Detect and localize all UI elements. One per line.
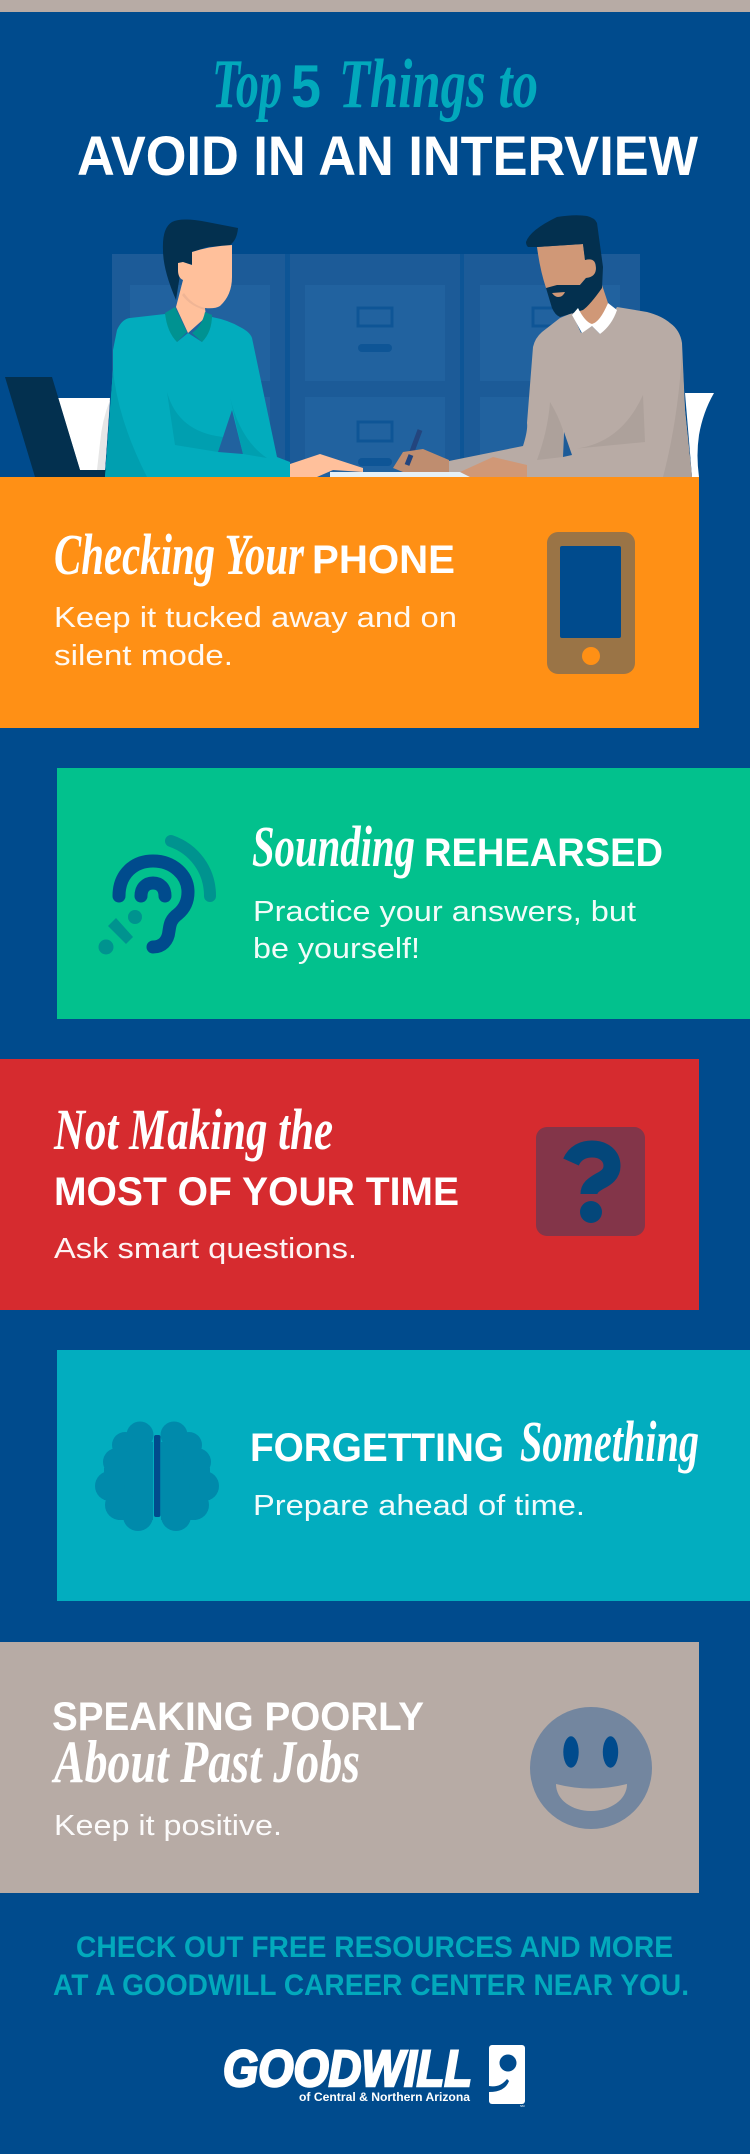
body text: phone: [54, 602, 457, 672]
title: Things to: [339, 46, 538, 123]
panel: forgetting something: [57, 1350, 750, 1601]
body text: positive: Keep it positive.: [54, 1810, 282, 1842]
call to action: [53, 1931, 689, 2002]
laptop: [5, 377, 147, 477]
icon: brain: [95, 1422, 219, 1531]
heading: speaking poorly about past jobs: [51, 1695, 424, 1795]
illustration: two people at an interview table: [5, 215, 714, 477]
logo: goodwill: of Central & Northern Arizona: [299, 2090, 470, 2104]
body text: prepare: Prepare ahead of time.: [253, 1490, 585, 1522]
heading: forgetting something: [250, 1409, 699, 1474]
heading: speaking poorly about past jobs: SPEAKING POORLY: [52, 1695, 424, 1739]
panel: making the most of your time: [0, 1059, 699, 1310]
panel: speaking poorly: [0, 1642, 699, 1893]
icon: phone: [547, 532, 635, 674]
logo: goodwill: GOODWILL: [223, 2040, 472, 2097]
heading: sounding rehearsed: [252, 814, 663, 879]
paper on the table: [330, 472, 470, 477]
heading: forgetting something: FORGETTING: [250, 1426, 504, 1470]
body text: rehearsed: Practice your answers, but: [253, 896, 636, 928]
heading: not making the most of your time: MOST OF YOUR TIME: [54, 1170, 459, 1214]
chair right: [685, 393, 714, 477]
icon: smiley: [530, 1707, 652, 1829]
body text: rehearsed: [253, 896, 636, 965]
body text: phone: Keep it tucked away and on: [54, 602, 457, 634]
panel: checking your phone: [0, 477, 699, 728]
man in grey sweater: [393, 215, 692, 477]
title: Top: [212, 46, 282, 123]
heading: checking your phone: PHONE: [312, 538, 455, 582]
icon: question mark: [536, 1127, 645, 1236]
chair left: [58, 398, 110, 470]
title: 5: [291, 53, 321, 120]
call to action: CHECK OUT FREE RESOURCES AND MORE: [76, 1931, 673, 1964]
icon: goodwill g mark: SM: [520, 2104, 525, 2108]
heading: not making the most of your time: [53, 1097, 459, 1214]
body text: phone: silent mode.: [54, 640, 233, 672]
filing cabinets: [112, 254, 640, 477]
heading: not making the most of your time: Not Making the: [53, 1097, 333, 1162]
heading: sounding rehearsed: REHEARSED: [424, 831, 663, 875]
panel: sounding rehearsed: [57, 768, 750, 1019]
man in teal sweater: [105, 220, 363, 477]
body text: questions: Ask smart questions.: [54, 1233, 357, 1265]
call to action: AT A GOODWILL CAREER CENTER NEAR YOU.: [53, 1969, 689, 2002]
icon: ear: [98, 841, 210, 954]
icon: goodwill g mark: [489, 2045, 525, 2108]
heading: checking your phone: Checking Your: [54, 522, 304, 587]
heading: speaking poorly about past jobs: About Past Jobs: [51, 1729, 360, 1795]
title: AVOID IN AN INTERVIEW: [77, 124, 698, 187]
title: [77, 46, 698, 187]
heading: sounding rehearsed: Sounding: [252, 814, 415, 879]
body text: rehearsed: be yourself!: [253, 933, 420, 965]
